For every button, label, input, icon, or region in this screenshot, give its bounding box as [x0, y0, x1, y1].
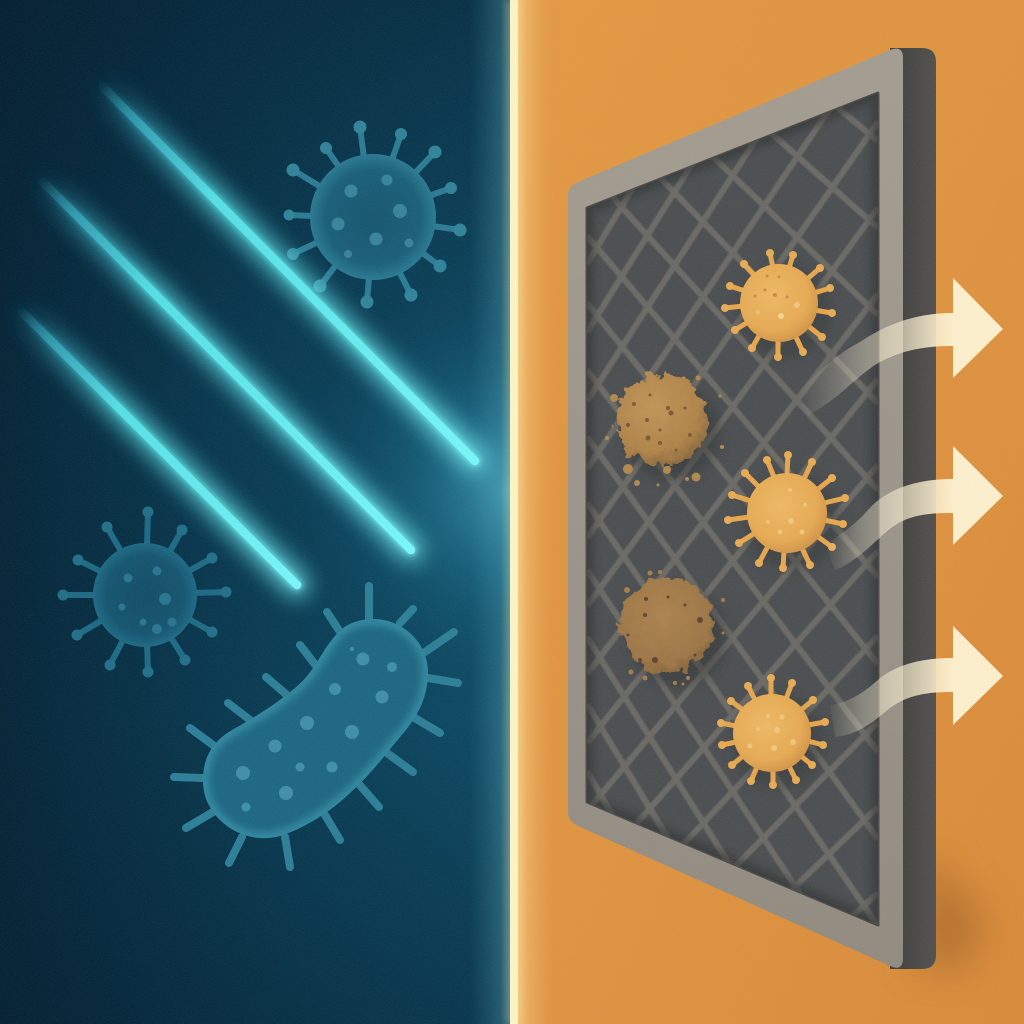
dust satellites — [624, 570, 725, 686]
virus spikes — [728, 455, 845, 568]
virus spike tips — [284, 120, 466, 308]
virus spikes — [721, 678, 825, 785]
virus surface dots — [332, 174, 414, 258]
virus dots — [766, 488, 807, 534]
dust particle lower — [620, 570, 726, 686]
arrow: clean air middle — [825, 446, 1003, 570]
virus spike tips — [717, 674, 829, 789]
icon: captured virus middle — [724, 451, 849, 572]
arrow: clean air top — [795, 278, 1003, 415]
mesh inner shadow — [587, 93, 878, 925]
virus shadow — [732, 696, 824, 788]
virus spikes — [289, 127, 460, 302]
divider: glowing vertical line — [506, 0, 521, 1024]
small virus spike tips — [58, 506, 232, 678]
virus body — [310, 154, 436, 280]
virus body — [733, 694, 811, 772]
virus spike tips — [721, 249, 836, 361]
panel: blue UV side background — [0, 0, 510, 1024]
dust specks — [626, 394, 692, 452]
virus spike tips — [724, 451, 849, 572]
icon: large virus upper left panel — [284, 120, 466, 308]
bacterium pili — [174, 586, 458, 867]
dust clump — [620, 578, 714, 672]
small virus dots — [118, 566, 176, 634]
virus shadow — [739, 266, 831, 358]
bacterium dots — [236, 647, 397, 812]
dust satellites — [605, 376, 724, 486]
bacterium rim light — [203, 619, 428, 838]
beam glow halo — [22, 87, 475, 585]
small virus spikes — [63, 512, 226, 672]
icon: captured virus top — [721, 249, 836, 361]
virus body — [740, 264, 818, 342]
virus dots — [748, 714, 796, 751]
filter ground shadow — [915, 850, 985, 970]
filter mesh lines — [587, 93, 878, 922]
beam mid glow — [22, 87, 475, 585]
beam core lines — [22, 87, 475, 585]
UV light beams — [22, 87, 475, 585]
icon: captured virus bottom — [717, 674, 829, 789]
virus dots — [754, 274, 800, 319]
virus shadow — [745, 474, 841, 570]
air filter — [568, 20, 936, 969]
virus body — [747, 473, 827, 553]
icon: rod bacterium — [174, 586, 458, 867]
bacterium body — [203, 619, 428, 838]
arrow: clean air bottom — [830, 626, 1003, 737]
small virus body — [93, 543, 197, 647]
dust shadow — [630, 590, 726, 686]
filter frame — [568, 49, 903, 968]
dust particle upper — [605, 374, 724, 486]
filter side edge — [890, 48, 936, 969]
dust shadow — [624, 384, 720, 480]
filter mesh panel — [587, 93, 878, 925]
panel: orange filter side background — [518, 0, 1024, 1024]
icon: smaller virus lower left panel — [58, 506, 232, 678]
dust clump — [616, 374, 708, 466]
dust specks — [626, 596, 703, 663]
virus spikes — [725, 253, 832, 357]
